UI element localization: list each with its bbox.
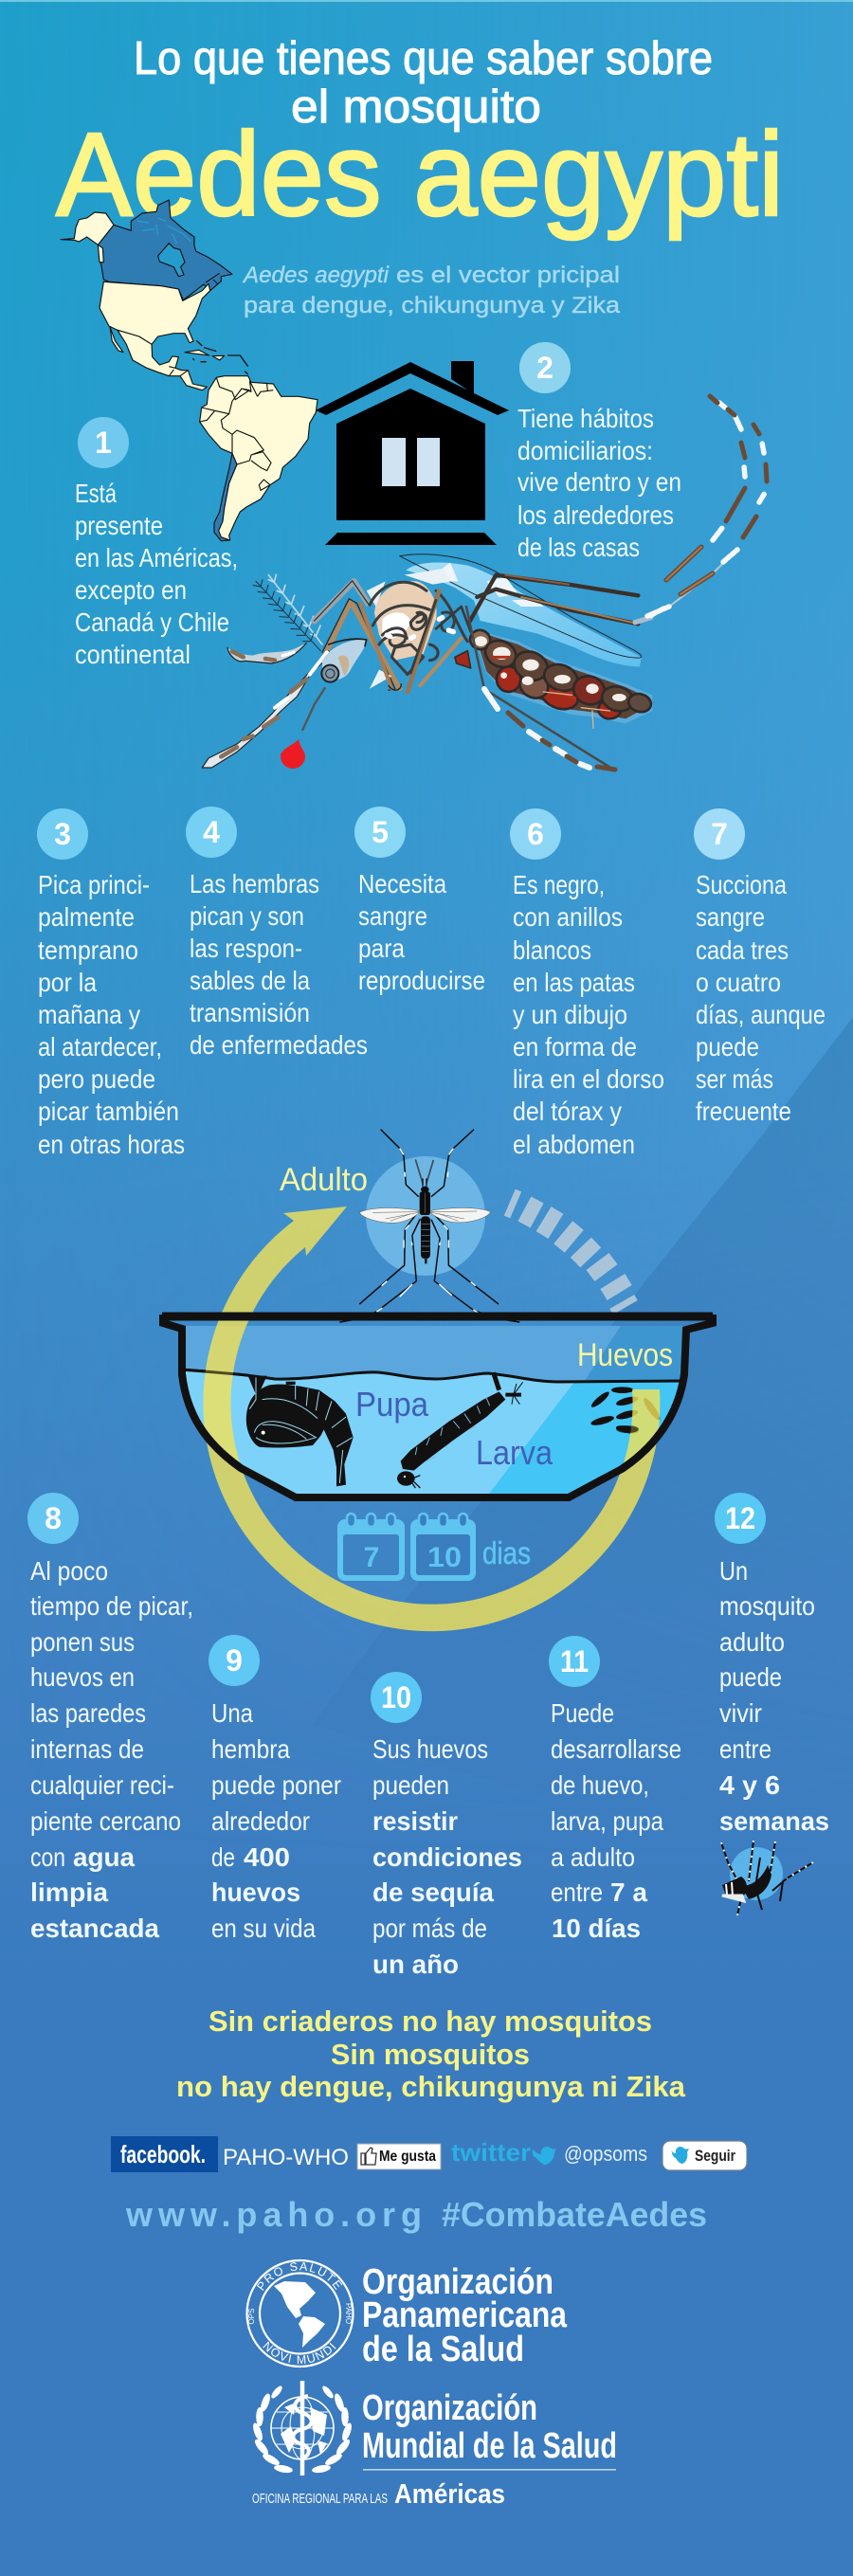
text 1: Está (75, 479, 118, 508)
badge 5: 5 (372, 815, 389, 849)
badge 3 (37, 808, 88, 860)
text 11: de huevo, (551, 1770, 649, 1800)
text 10: por más de (372, 1914, 487, 1943)
adult mosquito halo (366, 1156, 485, 1276)
text 12: semanas (719, 1806, 829, 1836)
text 12: puede (719, 1662, 782, 1692)
emblem (251, 2381, 354, 2476)
text 8: internas de (30, 1734, 144, 1764)
twitter wordmark: twitter (451, 2138, 531, 2167)
text 5: para (358, 934, 406, 963)
text 7: cada tres (696, 935, 789, 965)
social media bar (111, 2136, 747, 2172)
text 6: y un dibujo (513, 1000, 627, 1029)
text 11: larva, pupa (551, 1806, 664, 1836)
text 9: en su vida (211, 1914, 317, 1943)
text 1: Canadá y Chile (75, 608, 229, 637)
slogan (176, 2005, 686, 2103)
text 7: días, aunque (696, 1000, 826, 1029)
text 6: con anillos (513, 902, 623, 932)
text 12: vivir (719, 1698, 762, 1728)
text 9: alrededor (211, 1806, 310, 1836)
panel: fact 2 (517, 342, 681, 562)
text 2: Tiene hábitos (517, 404, 654, 433)
follow button (662, 2141, 747, 2170)
text 3: picar también (38, 1097, 179, 1126)
text 4: de enfermedades (190, 1030, 368, 1060)
bowl outline (162, 1315, 713, 1497)
panel: fact 6 (510, 808, 664, 1159)
text 3: palmente (38, 902, 135, 932)
facebook button (111, 2136, 218, 2172)
palp (227, 643, 306, 663)
slogan: Sin mosquitos (331, 2038, 530, 2071)
map: the Americas (61, 200, 318, 541)
badge 6 (510, 808, 561, 860)
text 3: al atardecer, (38, 1032, 162, 1061)
badge 1: 1 (95, 426, 112, 460)
badge 8: 8 (45, 1501, 62, 1535)
text 2: vive dentro y en (517, 467, 681, 497)
text 6: en las patas (513, 968, 635, 997)
text 6: Es negro, (513, 870, 605, 899)
logo: WHO (251, 2381, 617, 2510)
icon: adult mosquito (339, 1130, 519, 1322)
name: de la Salud (362, 2330, 524, 2369)
badge 5 (354, 807, 406, 858)
text 10: pueden (372, 1770, 449, 1800)
text 8: ponen sus (30, 1627, 135, 1657)
twitter handle: @opsoms (564, 2142, 647, 2166)
icon: eggs (590, 1387, 662, 1435)
text 4: las respon- (190, 934, 302, 963)
main heading: Aedes aegypti (56, 109, 784, 241)
text 3: Pica princi- (38, 870, 150, 899)
head (322, 640, 367, 680)
text 1: en las Américas, (75, 543, 238, 572)
text 11: 10 días (552, 1914, 641, 1943)
text 4 (190, 869, 368, 1060)
name (362, 2388, 617, 2466)
logo: PAHO (245, 2259, 568, 2369)
badge 8 (27, 1493, 79, 1544)
slogan: Sin criaderos no hay mosquitos (209, 2005, 652, 2038)
badge 10 (371, 1672, 422, 1723)
name: Organización (362, 2262, 554, 2302)
label: huevos: Huevos (577, 1337, 673, 1373)
name: Organización (362, 2388, 537, 2428)
text 8: cualquier reci- (30, 1770, 174, 1800)
text 5: reproducirse (358, 966, 485, 995)
text 2: de las casas (517, 533, 640, 562)
text 12: 4 y 6 (719, 1770, 780, 1800)
text 7: Succiona (696, 870, 788, 899)
badge 4: 4 (203, 815, 220, 849)
text 10: un año (372, 1950, 459, 1979)
text 7: puede (696, 1032, 759, 1061)
femur (315, 581, 368, 621)
wing (400, 554, 663, 728)
background (0, 0, 853, 1653)
website and hashtag: #CombateAedes (442, 2195, 707, 2234)
antenna feathers (268, 574, 322, 644)
regional office (252, 2479, 505, 2510)
badge 9 (209, 1635, 260, 1686)
panel: fact 7 (694, 808, 826, 1126)
text 3: por la (38, 968, 98, 997)
text 9: hembra (211, 1734, 291, 1764)
text 3: temprano (38, 935, 138, 965)
text 3 (38, 870, 185, 1159)
wings (359, 1208, 419, 1223)
body (420, 1191, 430, 1215)
text 2 (517, 404, 681, 562)
slogan: no hay dengue, chikungunya ni Zika (176, 2070, 686, 2103)
badge 7: 7 (711, 817, 728, 851)
text 12 (719, 1556, 829, 1836)
hind leg segments (647, 396, 767, 616)
text 9: de (211, 1842, 235, 1872)
label: pupa: Pupa (355, 1385, 429, 1424)
lower front leg (202, 651, 330, 768)
text 1 (75, 479, 238, 669)
badge 11: 11 (560, 1644, 589, 1678)
stylet (302, 688, 325, 730)
chart: life cycle (162, 1130, 713, 1631)
icon: calendar 10 days: 10 (427, 1542, 462, 1573)
text 8: las paredes (30, 1698, 146, 1728)
panel: fact 5 (354, 807, 485, 995)
title: Lo que tienes que saber sobre (134, 33, 713, 84)
badge 12: 12 (725, 1501, 755, 1535)
regional office: Américas (394, 2479, 505, 2510)
bowl outline under ring tint (162, 1316, 713, 1469)
text 10: resistir (372, 1806, 458, 1836)
text 7: sangre (696, 902, 765, 932)
panel: fact 4 (186, 807, 368, 1060)
icon: pupa (246, 1376, 354, 1486)
badge 1 (78, 417, 129, 468)
seal: OPS (247, 2309, 256, 2324)
seal: NOVI MUNDI (263, 2341, 336, 2364)
north and central america (61, 200, 248, 390)
lower hind leg (466, 607, 615, 771)
badge 10: 10 (381, 1680, 411, 1714)
dashed arc (507, 1190, 636, 1312)
icon: calendar 7 days (337, 1514, 405, 1581)
label: dias: dias (482, 1535, 531, 1570)
text 5: Necesita (358, 869, 447, 898)
text 2: domiciliarios: (517, 436, 653, 465)
text 6: del tórax y (513, 1097, 622, 1126)
badge 2 (519, 342, 571, 393)
subtitle: para dengue, chikungunya y Zika (244, 293, 621, 318)
text 6 (513, 870, 664, 1159)
subtitle (242, 263, 621, 318)
badge 9: 9 (226, 1643, 243, 1678)
like button (357, 2144, 441, 2169)
seal: PRO SALUTE (256, 2262, 343, 2291)
text 1: presente (75, 511, 163, 540)
text 10 (372, 1734, 522, 1979)
text 6: en forma de (513, 1032, 637, 1061)
text 8: limpia (30, 1878, 109, 1907)
name (362, 2262, 568, 2369)
illustration: biting mosquito (202, 396, 767, 771)
text 1: excepto en (75, 575, 187, 605)
text 10: de sequía (372, 1878, 495, 1907)
follow button: Seguir (695, 2147, 735, 2165)
text 4: sables de la (190, 966, 311, 995)
blood drop (281, 739, 305, 769)
badge 6: 6 (527, 817, 544, 851)
icon: calendar 10 days (410, 1514, 476, 1581)
text 9: huevos (211, 1878, 300, 1907)
thorax (374, 581, 437, 661)
label: adulto: Adulto (280, 1162, 368, 1198)
panel: fact 1 (75, 417, 238, 669)
text 6: el abdomen (513, 1130, 635, 1159)
text 10: Sus huevos (372, 1734, 488, 1764)
text 8: estancada (30, 1914, 160, 1943)
text 10: condiciones (372, 1842, 522, 1872)
icon: small mosquito (721, 1841, 813, 1915)
text 2: los alrededores (517, 500, 674, 530)
panel: fact 9 (209, 1635, 341, 1943)
abdomen (467, 626, 653, 728)
text 12: entre (719, 1734, 771, 1764)
text 12: adulto (719, 1627, 785, 1657)
subtitle: Aedes aegypti (242, 263, 390, 288)
text 4: transmisión (190, 998, 310, 1027)
text 1: continental (75, 640, 191, 669)
text 12: Un (719, 1556, 748, 1586)
panel: fact 10 (371, 1672, 522, 1979)
text 3: pero puede (38, 1064, 155, 1094)
text 9: Una (211, 1698, 254, 1728)
text 3: en otras horas (38, 1130, 185, 1159)
south america (200, 376, 318, 541)
panel: fact 3 (37, 808, 185, 1159)
panel: fact 12 (715, 1493, 829, 1915)
text 5: sangre (358, 901, 427, 931)
text 8: huevos en (30, 1662, 135, 1692)
seal: PAHO (344, 2303, 353, 2324)
text 7: o cuatro (696, 968, 781, 997)
facebook handle: PAHO-WHO (223, 2145, 349, 2170)
facebook button: facebook. (120, 2140, 206, 2168)
text 11 (551, 1698, 681, 1943)
name: Panamericana (362, 2295, 568, 2335)
text 5 (358, 869, 485, 995)
text 8 (30, 1556, 193, 1943)
text 4: Las hembras (190, 869, 319, 898)
text 11: a adulto (551, 1842, 635, 1872)
text 11: Puede (551, 1698, 614, 1728)
text 9: puede poner (211, 1770, 341, 1800)
text 6: blancos (513, 935, 591, 965)
text 11: desarrollarse (551, 1734, 681, 1764)
label: larva: Larva (476, 1433, 554, 1472)
text 3: mañana y (38, 1000, 140, 1029)
text 8: con (30, 1842, 65, 1872)
badge 11 (549, 1636, 600, 1687)
badge 12 (715, 1493, 766, 1544)
bowl (179, 1326, 692, 1497)
text 6: lira en el dorso (513, 1064, 664, 1094)
text 9 (211, 1698, 341, 1943)
text 4: pican y son (190, 901, 304, 931)
text 7: ser más (696, 1064, 773, 1094)
text 12: mosquito (719, 1591, 815, 1621)
icon: calendar 7 days: 7 (364, 1542, 379, 1573)
badge 4 (186, 807, 237, 858)
arrow: life cycle ring (203, 1206, 660, 1631)
panel: fact 8 (27, 1493, 193, 1943)
text 9: 400 (244, 1842, 290, 1872)
icon: larva (397, 1372, 523, 1488)
icon: house (316, 361, 509, 545)
badge 7 (694, 808, 745, 860)
subtitle: es el vector pricipal (396, 263, 620, 288)
seal (245, 2259, 354, 2367)
regional office: OFICINA REGIONAL PARA LAS (252, 2491, 388, 2507)
text 7: frecuente (696, 1097, 791, 1126)
text 11: 7 a (610, 1878, 648, 1907)
text 8: agua (73, 1842, 136, 1872)
badge 2: 2 (536, 351, 554, 385)
name: Mundial de la Salud (362, 2426, 617, 2466)
website and hashtag (125, 2195, 707, 2234)
website and hashtag: www.paho.org (125, 2195, 422, 2234)
title: el mosquito (291, 82, 541, 133)
text 8: Al poco (30, 1556, 108, 1586)
panel: fact 11 (549, 1636, 681, 1943)
title (134, 33, 713, 133)
text 8: piente cercano (30, 1806, 181, 1836)
text 11: entre (551, 1878, 603, 1907)
text 8: tiempo de picar, (30, 1591, 193, 1621)
text 7 (696, 870, 826, 1126)
badge 3: 3 (54, 817, 71, 851)
head, palps and front leg (202, 569, 471, 768)
like button: Me gusta (379, 2149, 436, 2165)
